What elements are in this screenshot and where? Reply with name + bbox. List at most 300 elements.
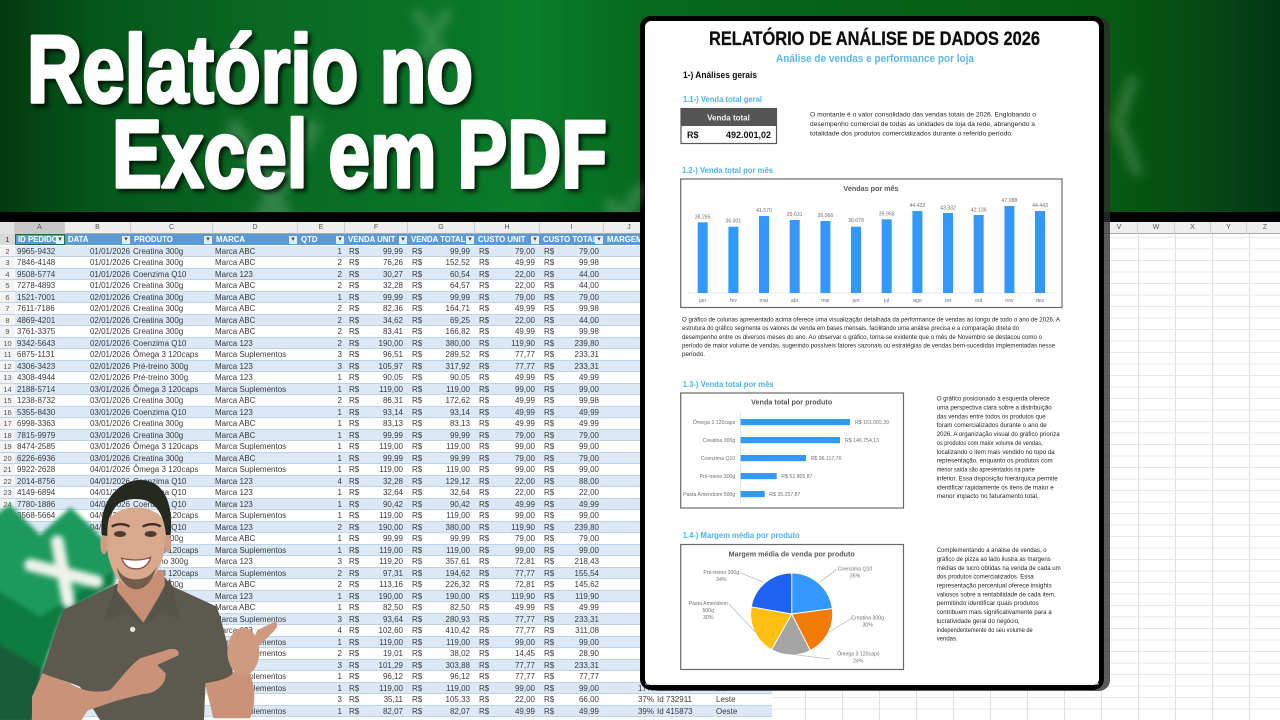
- sales data table: 5: [5, 281, 10, 290]
- presenter head: [106, 507, 166, 589]
- sales data table: R$: [544, 614, 554, 624]
- column letters header: E: [319, 224, 323, 231]
- sales data table: Creatina 300g: [133, 419, 183, 428]
- sales data table: R$: [479, 408, 489, 416]
- sales data table: 36: [3, 638, 12, 646]
- section 1.3 heading: 1.3-) Venda total por mês: [683, 380, 774, 389]
- sales data table: 3: [338, 362, 342, 370]
- sales data table: R$: [412, 292, 422, 302]
- sales data table: 16: [3, 408, 12, 416]
- sales data table: 22,00: [515, 281, 535, 290]
- section 1.3 description: inferior. Essa disposição hierárquica permite: [937, 475, 1058, 482]
- sales data table: R$: [412, 246, 422, 256]
- sales data table: Marca ABC: [215, 534, 255, 543]
- pie labels: 35%: [850, 574, 861, 580]
- sales data table: R$: [349, 522, 359, 532]
- sales data table: R$: [479, 281, 489, 290]
- month axis labels: dez: [1036, 298, 1045, 304]
- sales data table: 119,00: [446, 638, 470, 646]
- sales data table: 02/01/2026: [90, 338, 130, 348]
- month axis labels: set: [945, 298, 952, 304]
- sales data table: 6226-6936: [17, 454, 55, 462]
- sales data table: R$: [412, 430, 422, 440]
- bar chart: sales per product: Venda total por produto: [751, 398, 833, 406]
- sales data table: Marca 123: [215, 626, 253, 635]
- sales data table: 99,00: [579, 465, 599, 474]
- sales data table: 15: [3, 396, 12, 405]
- product labels: Ômega 3 120caps: [693, 419, 736, 426]
- sales data table: 5355-8430: [17, 408, 55, 416]
- sales data table: R$: [349, 511, 359, 520]
- sales data table: 303,88: [446, 660, 470, 670]
- sales data table: Marca Suplementos: [215, 546, 286, 554]
- sales data table: 93,64: [383, 614, 403, 624]
- month axis labels: jun: [852, 298, 860, 304]
- sales data table: 49,99: [579, 706, 599, 716]
- sales data table: Marca ABC: [215, 327, 255, 336]
- sales data table: R$: [412, 500, 422, 508]
- product labels: Pasta Amendoim 500g: [683, 492, 735, 498]
- sales data table: 34,62: [383, 316, 403, 324]
- sales data table: 90,05: [383, 373, 403, 382]
- presenter eyes and brows: [112, 524, 161, 537]
- sales data table: 38,02: [450, 649, 470, 658]
- sales data table: R$: [544, 396, 554, 405]
- sales data table: 101,29: [379, 660, 403, 670]
- sales data table: Marca ABC: [215, 246, 255, 256]
- sales data table: R$: [544, 511, 554, 520]
- sales data table: CUSTO UNIT: [478, 235, 526, 244]
- sales data table: 32,28: [383, 281, 403, 290]
- monthly value labels: 38.265: [695, 214, 711, 220]
- sales data table: 83,41: [383, 327, 403, 336]
- sales data table: Sul: [716, 684, 728, 692]
- sales data table: 1: [338, 292, 342, 302]
- sales data table: R$: [544, 592, 554, 600]
- monthly value labels: 44.433: [909, 203, 925, 209]
- sales data table: 1: [338, 500, 342, 508]
- sales data table: R$: [544, 626, 554, 635]
- sales data table: R$: [479, 511, 489, 520]
- sales data table: 72,81: [515, 580, 535, 589]
- sales data table: 99,00: [515, 684, 535, 692]
- sales data table: Creatina 300g: [133, 316, 183, 324]
- section 1.4 heading: 1.4-) Margem média por produto: [683, 531, 800, 540]
- sales data table: Creatina 300g: [133, 304, 183, 313]
- sales data table: Marca ABC: [215, 258, 255, 267]
- sales data table: 82,07: [383, 706, 403, 716]
- sales data table: 99,99: [383, 454, 403, 462]
- sales data table: R$: [544, 557, 554, 566]
- sales data table: 79,00: [579, 292, 599, 302]
- sales data table: 99,00: [515, 546, 535, 554]
- sales data table: R$: [412, 338, 422, 348]
- presenter right forearm: [205, 670, 254, 718]
- sales data table: 18: [3, 430, 12, 440]
- sales data table: 4306-3423: [17, 362, 55, 370]
- sales data table: R$: [349, 500, 359, 508]
- section 1.4 description: [937, 547, 1061, 643]
- report header: [683, 28, 1040, 80]
- sales data table: 83,13: [383, 419, 403, 428]
- sales data table: Marca ABC: [215, 281, 255, 290]
- monthly value labels: [695, 198, 1048, 224]
- monthly value labels: 47.088: [1001, 198, 1017, 204]
- sales data table: 04/01/2026: [90, 522, 130, 532]
- sales data table: 119,90: [511, 338, 535, 348]
- sales data table: R$: [479, 430, 489, 440]
- sales data table: R$: [349, 281, 359, 290]
- sales data table: Marca Suplementos: [215, 511, 286, 520]
- sales data table: 119,00: [446, 511, 470, 520]
- sales data table: 152,52: [446, 258, 470, 267]
- sales data table: Marca 123: [215, 373, 253, 382]
- sales data table: 1: [338, 592, 342, 600]
- sales data table: R$: [349, 706, 359, 716]
- sales data table: R$: [544, 316, 554, 324]
- sales data table: R$: [479, 626, 489, 635]
- pie labels: Ômega 3 120caps: [837, 650, 880, 658]
- product labels: [683, 419, 736, 498]
- sales data table: 01/01/2026: [90, 246, 130, 256]
- section 1.4 description: lucratividade geral do negócio,: [937, 618, 1020, 625]
- sales data table: R$: [544, 684, 554, 692]
- sales data table: [0, 234, 772, 717]
- sales data table: R$: [479, 362, 489, 370]
- sales data table: 14,45: [515, 649, 535, 658]
- sales data table: 3: [338, 695, 342, 704]
- sales data table: 113,16: [379, 580, 403, 589]
- sales data table: 29: [3, 557, 12, 566]
- sales data table: 40: [3, 684, 12, 692]
- sales data table: 28: [3, 546, 12, 554]
- sales data table: 02/01/2026: [90, 362, 130, 370]
- sales data table: Marca Suplementos: [215, 672, 286, 681]
- section 1.1 description: [810, 112, 1036, 138]
- sales data table: 3568-5664: [17, 511, 55, 520]
- sales data table: 13: [3, 373, 12, 382]
- month axis labels: ago: [913, 298, 922, 304]
- sales data table: 190,00: [379, 338, 403, 348]
- sales data table: Marca ABC: [215, 603, 255, 612]
- main title: Relatório no: [27, 16, 473, 123]
- month axis labels: mai: [821, 298, 830, 304]
- sales data table: 19: [3, 442, 12, 451]
- sales data table: 22,00: [515, 316, 535, 324]
- sales data table: 49,99: [515, 706, 535, 716]
- sales data table: Ômega 3 120caps: [133, 568, 198, 578]
- sales data table: R$: [412, 258, 422, 267]
- black separator band: [0, 212, 1280, 222]
- monthly value labels: 43.332: [940, 206, 956, 212]
- sales data table: R$: [412, 476, 422, 486]
- sales data table: R$: [479, 454, 489, 462]
- sales data table: 90,05: [450, 373, 470, 382]
- sales data table: 25: [3, 511, 12, 520]
- pie labels: Pasta Amendoim: [689, 601, 728, 607]
- sales data table: 4: [5, 270, 10, 278]
- sales data table: 239,80: [575, 522, 599, 532]
- sales data table: Marca Suplementos: [215, 568, 286, 578]
- sales data table: 97,31: [383, 568, 403, 578]
- sales data table: R$: [479, 638, 489, 646]
- sales data table: 1: [338, 419, 342, 428]
- section 1.3 description: das vendas entre todos os produtos que: [937, 413, 1046, 420]
- total sales KPI table: [681, 108, 776, 144]
- presenter hair: [101, 480, 171, 536]
- sales data table: R$: [479, 258, 489, 267]
- sales data table: R$: [479, 442, 489, 451]
- section 1.4 description: representação percentual oferece insights: [937, 582, 1052, 590]
- sales data table: 03/01/2026: [90, 396, 130, 405]
- sales data table: 1: [338, 442, 342, 451]
- sales data table: Marca 123: [215, 270, 253, 278]
- sales data table: 04/01/2026: [90, 476, 130, 486]
- sales data table: 194,62: [446, 568, 470, 578]
- sales data table: QTD: [301, 235, 317, 244]
- sales data table: R$: [479, 292, 489, 302]
- sales data table: 7780-1886: [17, 500, 55, 508]
- sales data table: 49,99: [515, 603, 535, 612]
- sales data table: Marca 123: [215, 488, 253, 497]
- sales data table: Ômega 3 120caps: [133, 511, 198, 520]
- section 1.3 description: 2026. A organização visual do gráfico prioriza: [937, 431, 1060, 438]
- sales data table: R$: [544, 649, 554, 658]
- total sales KPI table: R$: [687, 130, 699, 140]
- sales data table: 1: [338, 384, 342, 394]
- sales data table: R$: [479, 327, 489, 336]
- sales data table: 2014-8756: [17, 476, 55, 486]
- sales data table: 4308-4944: [17, 373, 55, 382]
- sales data table: 02/01/2026: [90, 304, 130, 313]
- section 1.4 description: médias de lucro obtidas na venda de cada um: [937, 565, 1061, 572]
- sales data table: R$: [349, 603, 359, 612]
- sales data table: R$: [349, 454, 359, 462]
- sales data table: R$: [479, 568, 489, 578]
- bar chart: sales per product: [681, 393, 904, 508]
- sales data table: 49,99: [579, 373, 599, 382]
- sales data table: R$: [479, 592, 489, 600]
- sales data table: R$: [349, 419, 359, 428]
- monthly value labels: 39.631: [787, 212, 803, 218]
- sales data table: R$: [412, 557, 422, 566]
- product labels: Coenzima Q10: [701, 456, 735, 462]
- sales data table: 99,00: [579, 442, 599, 451]
- sales data table: MARGEM: [607, 235, 643, 244]
- sales data table: 22,00: [515, 488, 535, 497]
- sales data table: 99,99: [383, 534, 403, 543]
- sales data table: 119,90: [511, 522, 535, 532]
- sales data table: R$: [479, 580, 489, 589]
- section 1.3 description: uma perspectiva clara sobre a distribuição: [937, 404, 1052, 412]
- sales data table: 3: [338, 660, 342, 670]
- section 1.2: monthly sales: [681, 166, 1062, 358]
- product value labels: R$ 96.117,76: [811, 456, 842, 462]
- sales data table: Marca 123: [215, 660, 253, 670]
- sales data table: R$: [349, 534, 359, 543]
- sales data table: 119,00: [379, 684, 403, 692]
- sales data table: R$: [412, 396, 422, 405]
- sales data table: R$: [412, 580, 422, 589]
- sales data table: PRODUTO: [134, 235, 173, 244]
- sales data table: R$: [412, 614, 422, 624]
- sales data table: 155,54: [575, 568, 599, 578]
- month axis labels: jan: [698, 298, 706, 304]
- sales data table: 04/01/2026: [90, 488, 130, 497]
- column letters header: H: [504, 224, 510, 231]
- section 1.2 description: estrutura do gráfico segmenta os valores de venda em bases mensais, facilitando uma análise precisa e a comparação direta do: [682, 325, 1019, 332]
- sales data table: 4: [338, 626, 342, 635]
- sales data table: 8474-2585: [17, 442, 55, 451]
- section 1.1 description: desempenho comercial de todas as unidades de loja da rede, abrangendo a: [810, 121, 1035, 128]
- sales data table: 1: [338, 706, 342, 716]
- sales data table: 42: [3, 706, 12, 716]
- month axis labels: nov: [1005, 298, 1014, 304]
- sales data table: Marca Suplementos: [215, 614, 286, 624]
- sales data table: R$: [349, 488, 359, 497]
- sales data table: R$: [412, 511, 422, 520]
- sales data table: R$: [412, 362, 422, 370]
- sales data table: 72,81: [515, 557, 535, 566]
- sales data table: 26: [3, 522, 12, 532]
- sales data table: 105,97: [379, 362, 403, 370]
- column letters header: D: [252, 224, 258, 231]
- sales data table: Marca ABC: [215, 292, 255, 302]
- sales data table: R$: [349, 465, 359, 474]
- sales data table: 49,99: [515, 327, 535, 336]
- sales data table: R$: [412, 408, 422, 416]
- sales data table: 7611-7186: [17, 304, 55, 313]
- sales data table: 22: [3, 476, 12, 486]
- sales data table: 49,99: [515, 258, 535, 267]
- sales data table: 90,42: [450, 500, 470, 508]
- sales data table: 35,11: [384, 695, 403, 704]
- sales data table: 105,33: [446, 695, 470, 704]
- product value labels: R$ 146.754,13: [845, 438, 879, 444]
- sales data table: Marca ABC: [215, 304, 255, 313]
- total sales KPI table: Venda total: [707, 114, 750, 122]
- sales data table: 04/01/2026: [90, 511, 130, 520]
- sales data table: 190,00: [379, 592, 403, 600]
- sales data table: R$: [544, 362, 554, 370]
- sales data table: R$: [412, 522, 422, 532]
- sales data table: 99,00: [579, 638, 599, 646]
- section 1.3 description: localizando o item mais vendido no topo da: [937, 449, 1055, 456]
- sales data table: R$: [349, 638, 359, 646]
- monthly value labels: 39.066: [817, 213, 833, 219]
- sales data table: R$: [412, 384, 422, 394]
- column letters header: V: [1117, 224, 1121, 231]
- sales data table: R$: [349, 568, 359, 578]
- sales data table: R$: [544, 638, 554, 646]
- pie leader lines: [729, 569, 852, 659]
- sales data table: 49,99: [579, 419, 599, 428]
- sales data table: R$: [412, 327, 422, 336]
- sales data table: 49,99: [579, 500, 599, 508]
- sales data table: Coenzima Q10: [133, 522, 186, 532]
- sales data table: 79,00: [515, 430, 535, 440]
- sales data table: 1521-7001: [17, 292, 55, 302]
- sales data table: Creatina 300g: [133, 292, 183, 302]
- sales data table: 410,42: [446, 626, 470, 635]
- sales data table: R$: [479, 338, 489, 348]
- sales data table: 8: [5, 316, 10, 324]
- sales data table: 79,00: [579, 534, 599, 543]
- sales data table: R$: [479, 419, 489, 428]
- sales data table: Coenzima Q10: [133, 408, 186, 416]
- sales data table: 119,00: [446, 684, 470, 692]
- sales data table: 226,32: [446, 580, 470, 589]
- sales data table: 9508-5774: [17, 270, 55, 278]
- sales data table: R$: [412, 373, 422, 382]
- sales data table: 1: [338, 511, 342, 520]
- sales data table: Marca Suplementos: [215, 684, 286, 692]
- sales data table: 79,00: [515, 292, 535, 302]
- pie chart: average margin per product: [681, 544, 904, 670]
- sales data table: R$: [479, 488, 489, 497]
- sales data table: 9342-5643: [17, 338, 55, 348]
- sales data table: R$: [544, 373, 554, 382]
- sales data table: 93,14: [383, 408, 403, 416]
- sales data table: R$: [544, 476, 554, 486]
- sales data table: R$: [544, 672, 554, 681]
- sales data table: Creatina 300g: [133, 258, 183, 267]
- sales data table: R$: [412, 649, 422, 658]
- sales data table: R$: [479, 270, 489, 278]
- sales data table: Marca Suplementos: [215, 649, 286, 658]
- product labels: Pré-treino 300g: [700, 474, 735, 480]
- sales data table: 1: [338, 638, 342, 646]
- product value labels: R$ 52.805,87: [781, 474, 813, 480]
- sales data table: R$: [479, 684, 489, 692]
- sales data table: 119,90: [511, 592, 535, 600]
- sales data table: R$: [544, 603, 554, 612]
- sales data table: 99,99: [383, 430, 403, 440]
- sales data table: 82,50: [383, 603, 403, 612]
- monthly value labels: 41.570: [756, 208, 772, 214]
- sales data table: 82,36: [383, 304, 403, 313]
- blurred Excel X marks in banner: [235, 14, 1136, 246]
- sales data table: R$: [349, 338, 359, 348]
- sales data table: Ômega 3 120caps: [133, 546, 198, 554]
- sales data table: Id 732911: [657, 695, 692, 704]
- sales data table: 04/01/2026: [90, 500, 130, 508]
- sales data table: Pré-treino 300g: [133, 373, 188, 382]
- sales data table: 79,00: [579, 430, 599, 440]
- sales data table: R$: [544, 281, 554, 290]
- sales data table: 76,26: [383, 258, 403, 267]
- sales data table: R$: [412, 270, 422, 278]
- sales data table: 7815-9979: [17, 430, 55, 440]
- sales data table: 69,25: [450, 316, 470, 324]
- sales data table: 2: [338, 327, 342, 336]
- sales data table: R$: [544, 580, 554, 589]
- sales data table: 9: [5, 327, 10, 336]
- sales data table: 119,00: [446, 546, 470, 554]
- section 1.3 description: foram comercializados durante o ano de: [937, 422, 1047, 429]
- sales data table: 82,50: [450, 603, 470, 612]
- sales data table: R$: [544, 660, 554, 670]
- sales data table: 27: [3, 534, 12, 543]
- sales data table: 380,00: [446, 522, 470, 532]
- sales data table: 2: [338, 338, 342, 348]
- sales data table: R$: [544, 430, 554, 440]
- sales data table: 02/01/2026: [90, 292, 130, 302]
- sales data table: 32,64: [383, 488, 403, 497]
- sales data table: 38: [3, 660, 12, 670]
- sales data table: Marca Suplementos: [215, 706, 286, 716]
- sales data table: 77,77: [515, 626, 535, 635]
